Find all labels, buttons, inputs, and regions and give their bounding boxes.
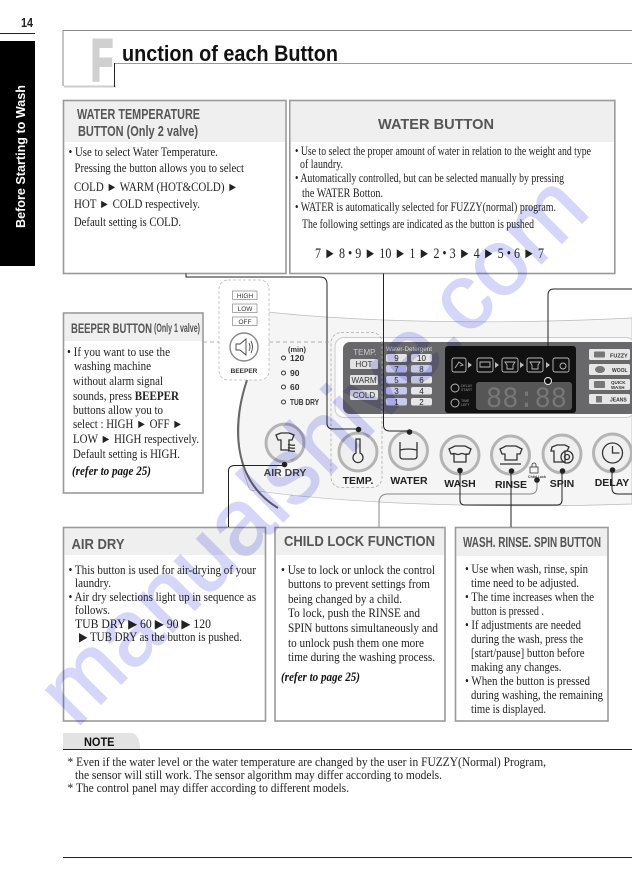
text: beeper button: • If you want to use the	[67, 345, 170, 359]
text: child lock function: To lock, push the RINSE and	[288, 606, 421, 620]
text: water button: 7 ► 8 • 9 ► 10 ► 1 ► 2 • 3 ► 4 ► 5 • 6 ► 7	[315, 246, 544, 262]
text: child lock function: • Use to lock or unlock the control	[281, 563, 435, 577]
black display: DELAY	[461, 384, 473, 388]
water level selector: 1	[394, 398, 399, 407]
note section	[63, 733, 632, 795]
page number: 14	[21, 15, 34, 30]
panel: beeper button	[64, 313, 203, 493]
text: air dry: follows.	[75, 603, 110, 617]
program buttons: WASH	[611, 385, 624, 390]
heading: beeper button: BEEPER BUTTON	[71, 320, 152, 336]
heading: water button: WATER BUTTON	[378, 116, 494, 133]
note text: the sensor will still work. The sensor algorithm may differ according to models.	[75, 768, 442, 782]
display surround	[335, 338, 632, 418]
text: water button: • WATER is automatically selected for FUZZY(normal) program.	[295, 200, 556, 214]
text: beeper button: select : HIGH ► OFF ►	[73, 417, 183, 431]
panel: water temperature button	[64, 100, 286, 274]
text: water temperature: • Use to select Water Temperature.	[68, 145, 218, 159]
text: child lock function	[281, 563, 439, 684]
water level selector: 9	[394, 354, 399, 363]
temperature selector: WARM	[351, 376, 377, 385]
button: temperature	[339, 433, 377, 487]
text: air dry: ▶ TUB DRY as the button is pushed.	[79, 630, 242, 644]
text: wash rinse spin: • If adjustments are needed	[465, 618, 582, 632]
text: wash rinse spin: during the wash, press the	[471, 632, 583, 646]
button: air dry	[264, 424, 306, 479]
black display: TIME	[461, 399, 470, 403]
text: beeper button: buttons allow you to	[73, 403, 163, 417]
heading: water temperature: WATER TEMPERATURE	[77, 106, 200, 123]
dark control strip	[343, 342, 632, 414]
water level selector: 6	[419, 376, 424, 385]
water level selector: 2	[419, 398, 424, 407]
text: child lock function: time during the washing process.	[288, 650, 435, 664]
title text: unction of each Button	[122, 41, 338, 66]
program buttons: FUZZY	[610, 354, 628, 360]
text: air dry: laundry.	[75, 576, 111, 590]
side tab	[0, 41, 35, 266]
beeper selector: LOW	[238, 306, 253, 313]
button: water	[390, 432, 428, 487]
text: water temperature: COLD ► WARM (HOT&COLD) ►	[74, 180, 238, 194]
heading: air dry: AIR DRY	[72, 536, 124, 553]
water level selector	[386, 346, 432, 407]
button: rinse	[492, 436, 530, 491]
beeper selector	[219, 280, 269, 380]
button: air dry: AIR DRY	[264, 467, 306, 479]
button: spin	[543, 435, 581, 490]
text: beeper button	[67, 345, 199, 478]
note text: * The control panel may differ according to different models.	[68, 781, 349, 795]
button: wash: WASH	[444, 478, 476, 490]
water level selector: 4	[419, 387, 424, 396]
text: beeper button: LOW ► HIGH respectively.	[73, 432, 199, 446]
panel: child lock function	[275, 528, 445, 721]
button: temperature: TEMP.	[343, 475, 373, 487]
page number rule	[0, 33, 35, 34]
program buttons: QUICK	[611, 380, 626, 385]
panel: wash rinse spin button	[456, 528, 608, 721]
text: water temperature: Default setting is COLD.	[74, 215, 181, 229]
water level selector: Water-Detergent	[386, 346, 432, 353]
program buttons: JEANS	[610, 398, 627, 404]
air dry time indicators: (min)	[288, 347, 306, 354]
text: wash rinse spin: [start/pause] button before	[471, 646, 585, 660]
black display: 88:88	[486, 383, 567, 417]
text: child lock function: buttons to prevent settings from	[288, 577, 430, 591]
icon: child lock: Child Lock	[528, 475, 546, 479]
water level selector: 8	[419, 365, 424, 374]
black display: START	[461, 388, 473, 392]
black display	[445, 346, 576, 417]
text: wash rinse spin: during washing, the remaining	[471, 688, 604, 702]
temp dashed outline	[331, 332, 382, 488]
button: delay	[594, 434, 632, 489]
leader lines	[186, 274, 632, 527]
panel: air dry	[64, 528, 266, 721]
text: beeper button: without alarm signal	[73, 374, 163, 388]
text: water button: of laundry.	[300, 157, 343, 171]
text: water button: the WATER Botton.	[302, 186, 383, 200]
heading: water temperature: BUTTON (Only 2 valve)	[78, 123, 198, 140]
note tab	[63, 733, 140, 749]
text: water button	[295, 144, 591, 262]
icon: child lock	[528, 463, 546, 479]
text: water button: The following settings are indicated as the button is pushed	[302, 217, 535, 231]
footer rule	[63, 857, 632, 858]
text: air dry: • This button is used for air-drying of your	[68, 563, 257, 577]
watermark: manualshive.com	[17, 153, 606, 743]
text: water temperature: HOT ► COLD respectively.	[74, 197, 200, 211]
text: air dry	[68, 563, 257, 644]
control panel body	[239, 312, 632, 506]
text: air dry: TUB DRY ▶ 60 ▶ 90 ▶ 120	[75, 617, 211, 631]
air dry time indicators	[282, 347, 320, 407]
heading: water temperature	[77, 106, 200, 140]
button: rinse: RINSE	[495, 479, 527, 491]
temperature selector	[350, 348, 378, 400]
text: wash rinse spin: • The time increases when the	[465, 590, 594, 604]
heading: child lock function: CHILD LOCK FUNCTION	[284, 533, 435, 550]
note text	[68, 755, 546, 795]
black display: LEFT	[461, 403, 470, 407]
temperature selector: TEMP.	[353, 348, 377, 357]
panel: water button	[290, 100, 615, 274]
title block	[63, 28, 632, 94]
note heading: NOTE	[84, 735, 114, 749]
air dry time indicators: TUB DRY	[290, 398, 320, 407]
beeper selector: OFF	[238, 319, 252, 326]
text: wash rinse spin: button is pressed .	[471, 604, 544, 618]
text: wash rinse spin	[465, 562, 604, 716]
text: child lock function: being changed by a child.	[288, 592, 402, 606]
button: water: WATER	[390, 475, 428, 487]
text: child lock function: SPIN buttons simultaneously and	[288, 621, 439, 635]
text: wash rinse spin: making any changes.	[471, 660, 562, 674]
temperature selector: COLD	[353, 391, 375, 400]
text: beeper button: Default setting is HIGH.	[73, 447, 180, 461]
text: water button: • Automatically controlled, but can be selected manually by pressing	[295, 171, 565, 185]
text: beeper button: sounds, press BEEPER	[73, 389, 180, 403]
heading: beeper button: (Only 1 valve)	[154, 321, 200, 335]
text: water temperature: Pressing the button allows you to select	[74, 161, 244, 175]
button: delay: DELAY	[595, 477, 629, 489]
text: wash rinse spin: • Use when wash, rinse, spin	[465, 562, 589, 576]
air dry time indicators: 120	[290, 353, 304, 363]
text: beeper button: washing machine	[74, 359, 151, 373]
text: wash rinse spin: • When the button is pressed	[465, 674, 591, 688]
control panel left curve	[238, 380, 278, 508]
text: child lock function: (refer to page 25)	[281, 669, 360, 684]
program buttons: WOOL	[612, 368, 628, 374]
title drop capital: F	[91, 28, 113, 94]
water level selector: 7	[394, 365, 399, 374]
note text: * Even if the water level or the water temperature are changed by the user in FUZZY(Normal) Program,	[68, 755, 546, 769]
water level selector: 5	[394, 376, 399, 385]
water level selector: 10	[417, 354, 426, 363]
button: wash	[441, 436, 479, 490]
button: spin: SPIN	[550, 478, 574, 490]
beeper selector: BEEPER	[231, 368, 258, 375]
text: wash rinse spin: time is displayed.	[471, 702, 546, 716]
text: beeper button: (refer to page 25)	[72, 463, 151, 478]
panel: control panel illustration	[238, 312, 632, 508]
text: wash rinse spin: time need to be adjusted.	[471, 576, 579, 590]
beeper selector: HIGH	[237, 293, 253, 300]
side tab text: Before Starting to Wash	[13, 85, 28, 228]
text: child lock function: to unlock push them one more	[288, 636, 424, 650]
temperature selector: HOT	[356, 360, 373, 369]
air dry time indicators: 90	[290, 368, 300, 378]
text: water temperature	[68, 145, 244, 229]
program buttons	[589, 349, 630, 404]
text: air dry: • Air dry selections light up in sequence as	[68, 590, 256, 604]
air dry time indicators: 60	[290, 382, 300, 392]
water level selector: 3	[394, 387, 399, 396]
